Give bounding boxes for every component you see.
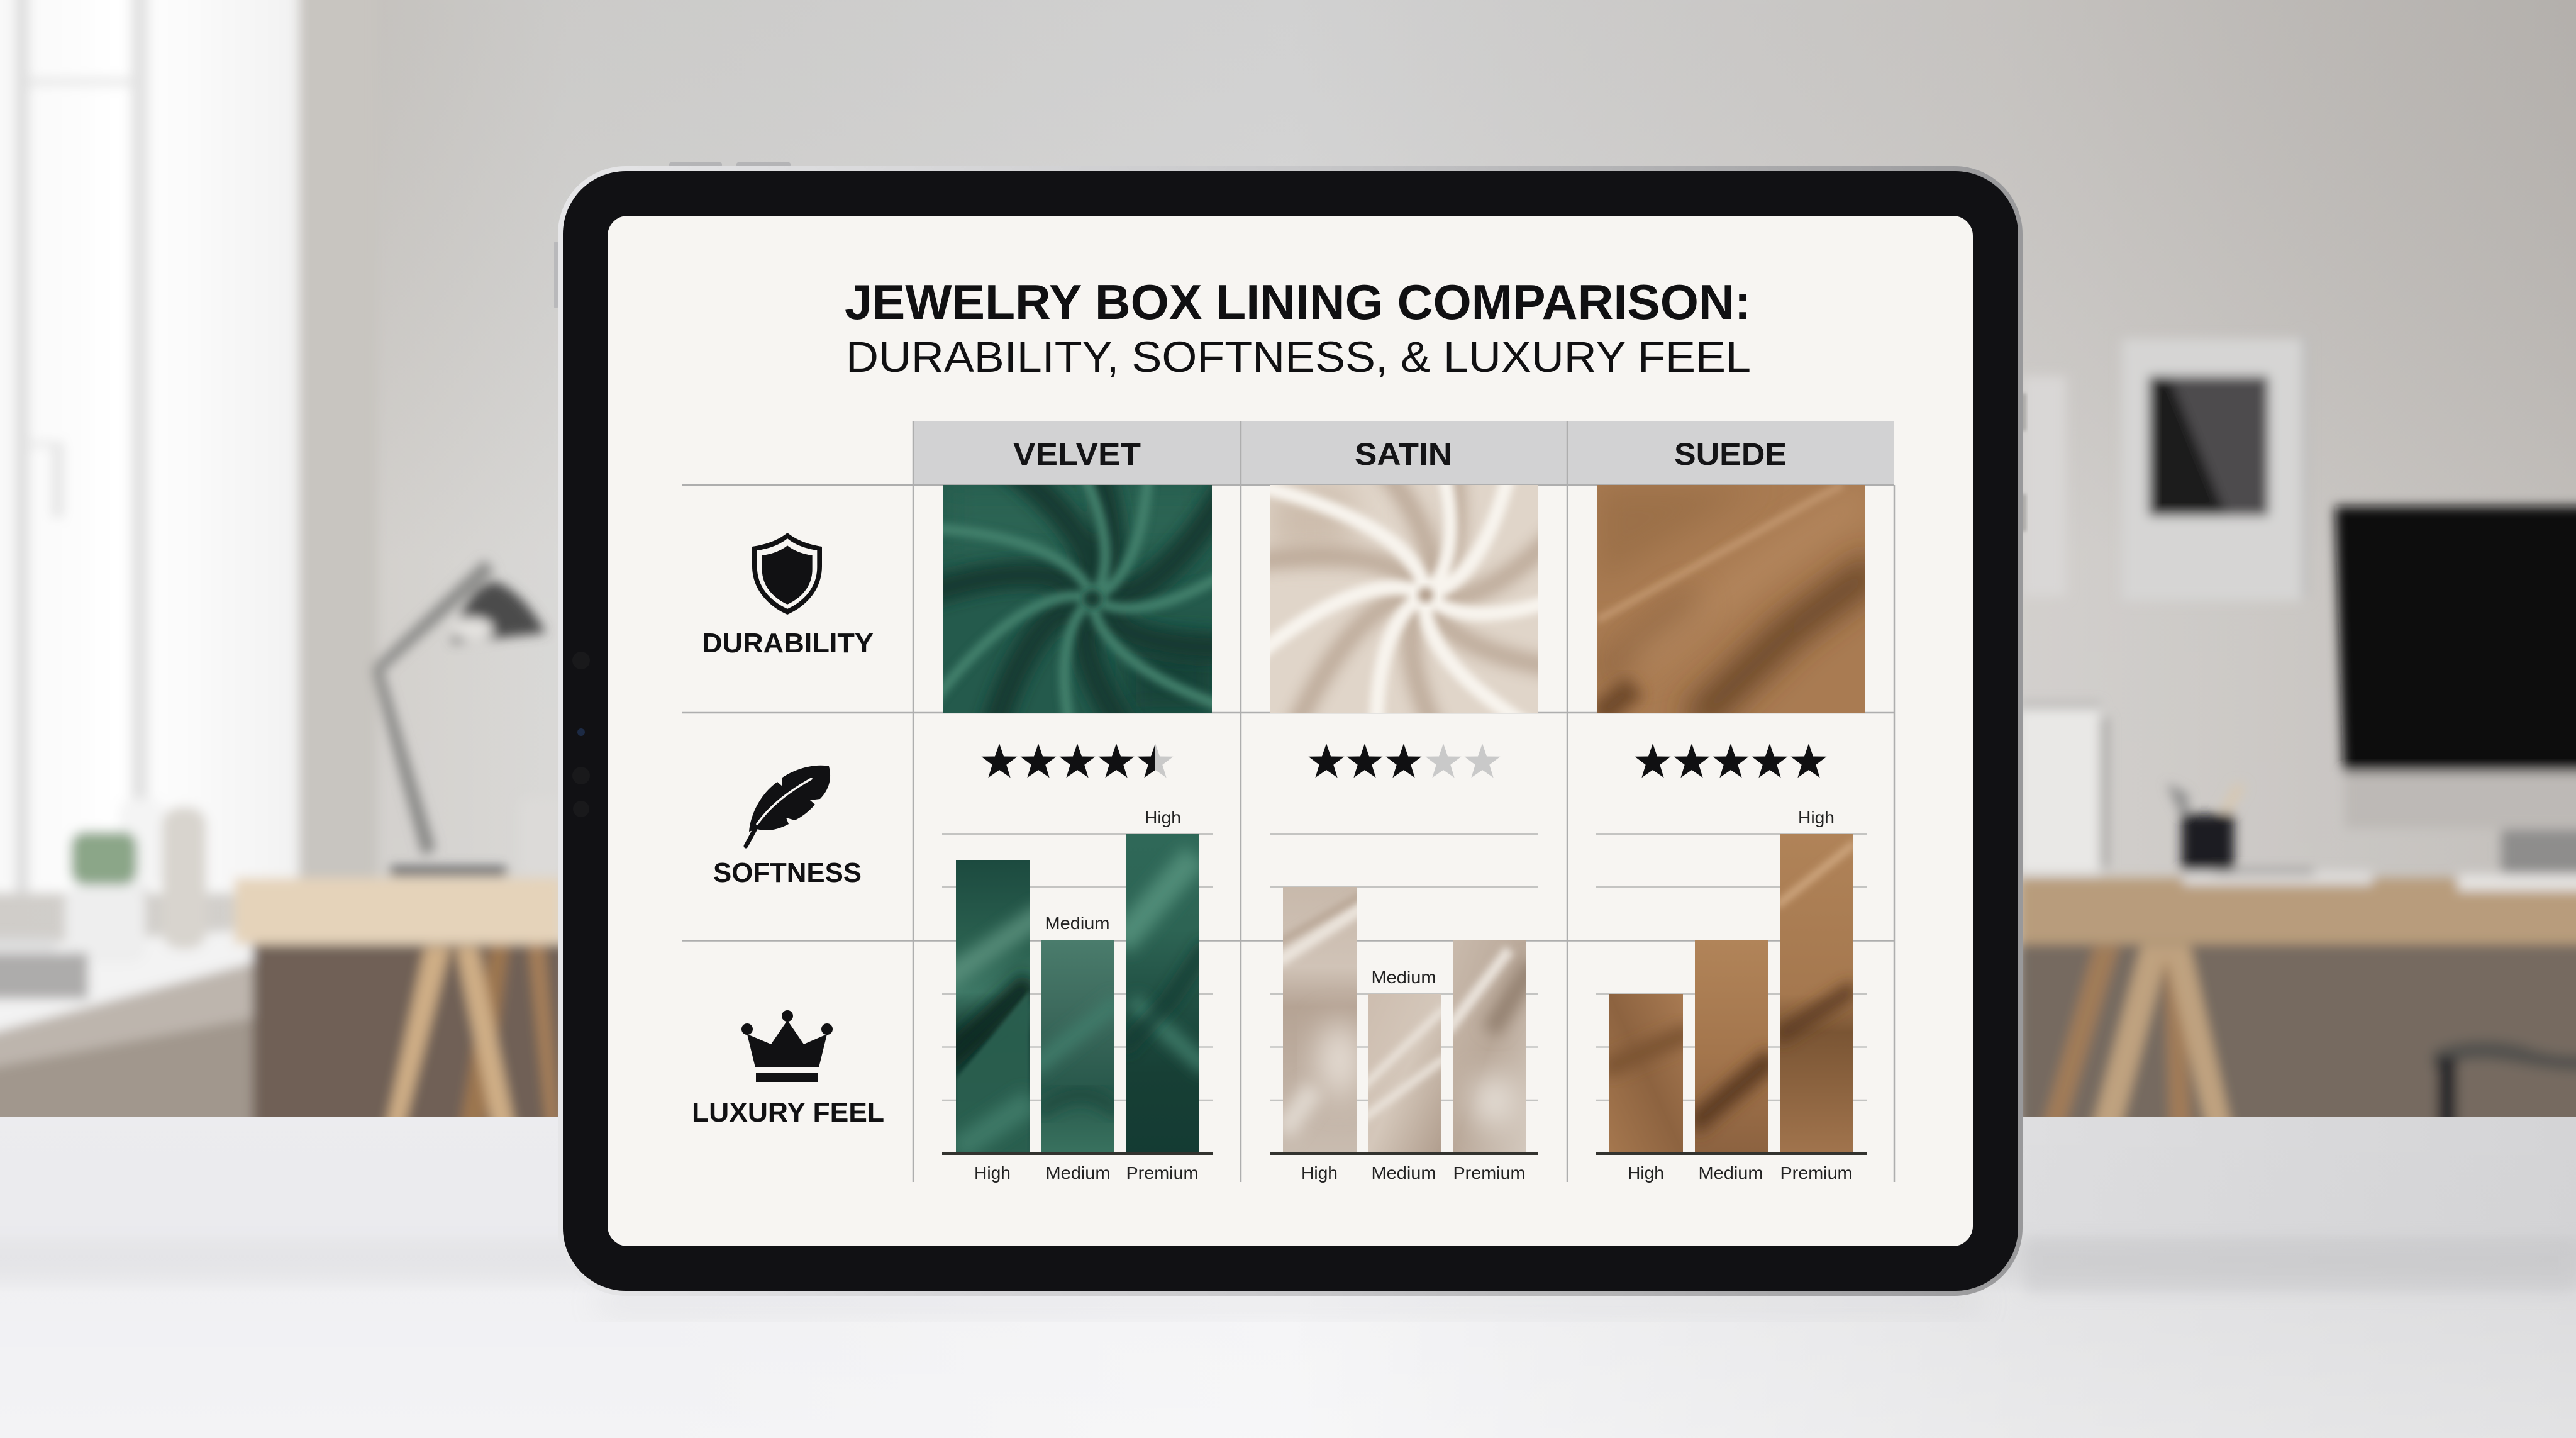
value label: medium: Medium (1371, 967, 1436, 987)
label: LUXURY FEEL (692, 1097, 884, 1128)
window (0, 0, 377, 893)
axis labels: Premium (1780, 1163, 1853, 1183)
axis labels: Medium (1371, 1163, 1436, 1183)
axis labels: Medium (1698, 1163, 1763, 1183)
medium label backdrop (1357, 942, 1453, 993)
bar: satin medium (1368, 994, 1441, 1152)
icon: shield (752, 533, 822, 615)
axis labels (974, 1163, 1199, 1183)
axis labels: Premium (1126, 1163, 1199, 1183)
bar: suede medium (1692, 940, 1774, 1154)
title (845, 274, 1751, 381)
bar: suede premium (1777, 834, 1855, 1154)
tablet silver frame (558, 166, 2023, 1296)
table grid lines (682, 421, 1894, 1182)
bar: velvet high (956, 860, 1030, 1152)
main heading: JEWELRY BOX LINING COMPARISON: (845, 274, 1751, 330)
axis labels: High (1628, 1163, 1664, 1183)
window sill and cabinet (0, 925, 567, 1139)
bar: velvet medium (1041, 940, 1114, 1152)
subtitle: DURABILITY, SOFTNESS, & LUXURY FEEL (846, 333, 1751, 381)
header: satin: SATIN (1355, 437, 1452, 472)
axis labels: High (1301, 1163, 1338, 1183)
bar: velvet premium (1126, 834, 1199, 1152)
tablet black bezel (563, 171, 2018, 1291)
icon: feather (746, 766, 830, 846)
tablet device (554, 162, 2026, 1296)
axis labels (1301, 1163, 1526, 1183)
axis labels (1628, 1163, 1853, 1183)
table surface (0, 1117, 2576, 1438)
bar chart: suede (1596, 808, 1867, 1183)
row label: softness (713, 766, 862, 888)
axis labels: Medium (1045, 1163, 1111, 1183)
rating: velvet stars (981, 744, 1174, 778)
bar: satin premium (1453, 940, 1526, 1152)
value label: high: High (1798, 808, 1835, 827)
header: suede: SUEDE (1674, 437, 1787, 472)
tablet hardware buttons (554, 162, 2026, 532)
plant and vases (0, 799, 206, 999)
header: velvet: VELVET (1013, 437, 1141, 472)
swatch: velvet fabric (943, 485, 1212, 713)
axis labels: High (974, 1163, 1011, 1183)
swatch: satin fabric (1099, 485, 1538, 775)
rating: satin stars (1308, 744, 1501, 778)
axis labels: Premium (1453, 1163, 1526, 1183)
bar: satin high (1283, 887, 1357, 1152)
bar chart: satin (1270, 834, 1538, 1183)
icon: crown (741, 1010, 833, 1082)
row label: durability (702, 533, 874, 659)
tablet screen (608, 216, 1973, 1246)
bar: suede high (1604, 994, 1692, 1154)
value label: high: High (1145, 808, 1181, 827)
table headers (913, 421, 1894, 485)
label: SOFTNESS (713, 857, 862, 888)
camera dots (572, 652, 590, 817)
row label: luxury feel (692, 1010, 884, 1128)
label: DURABILITY (702, 628, 874, 659)
desk with lamp (left) (235, 560, 562, 1132)
bar chart: velvet (942, 808, 1213, 1183)
rating: suede stars (1635, 744, 1826, 778)
swatch: suede fabric (1597, 485, 1877, 723)
desk with monitor (right) (2019, 333, 2576, 1139)
value label: medium: Medium (1045, 913, 1109, 933)
